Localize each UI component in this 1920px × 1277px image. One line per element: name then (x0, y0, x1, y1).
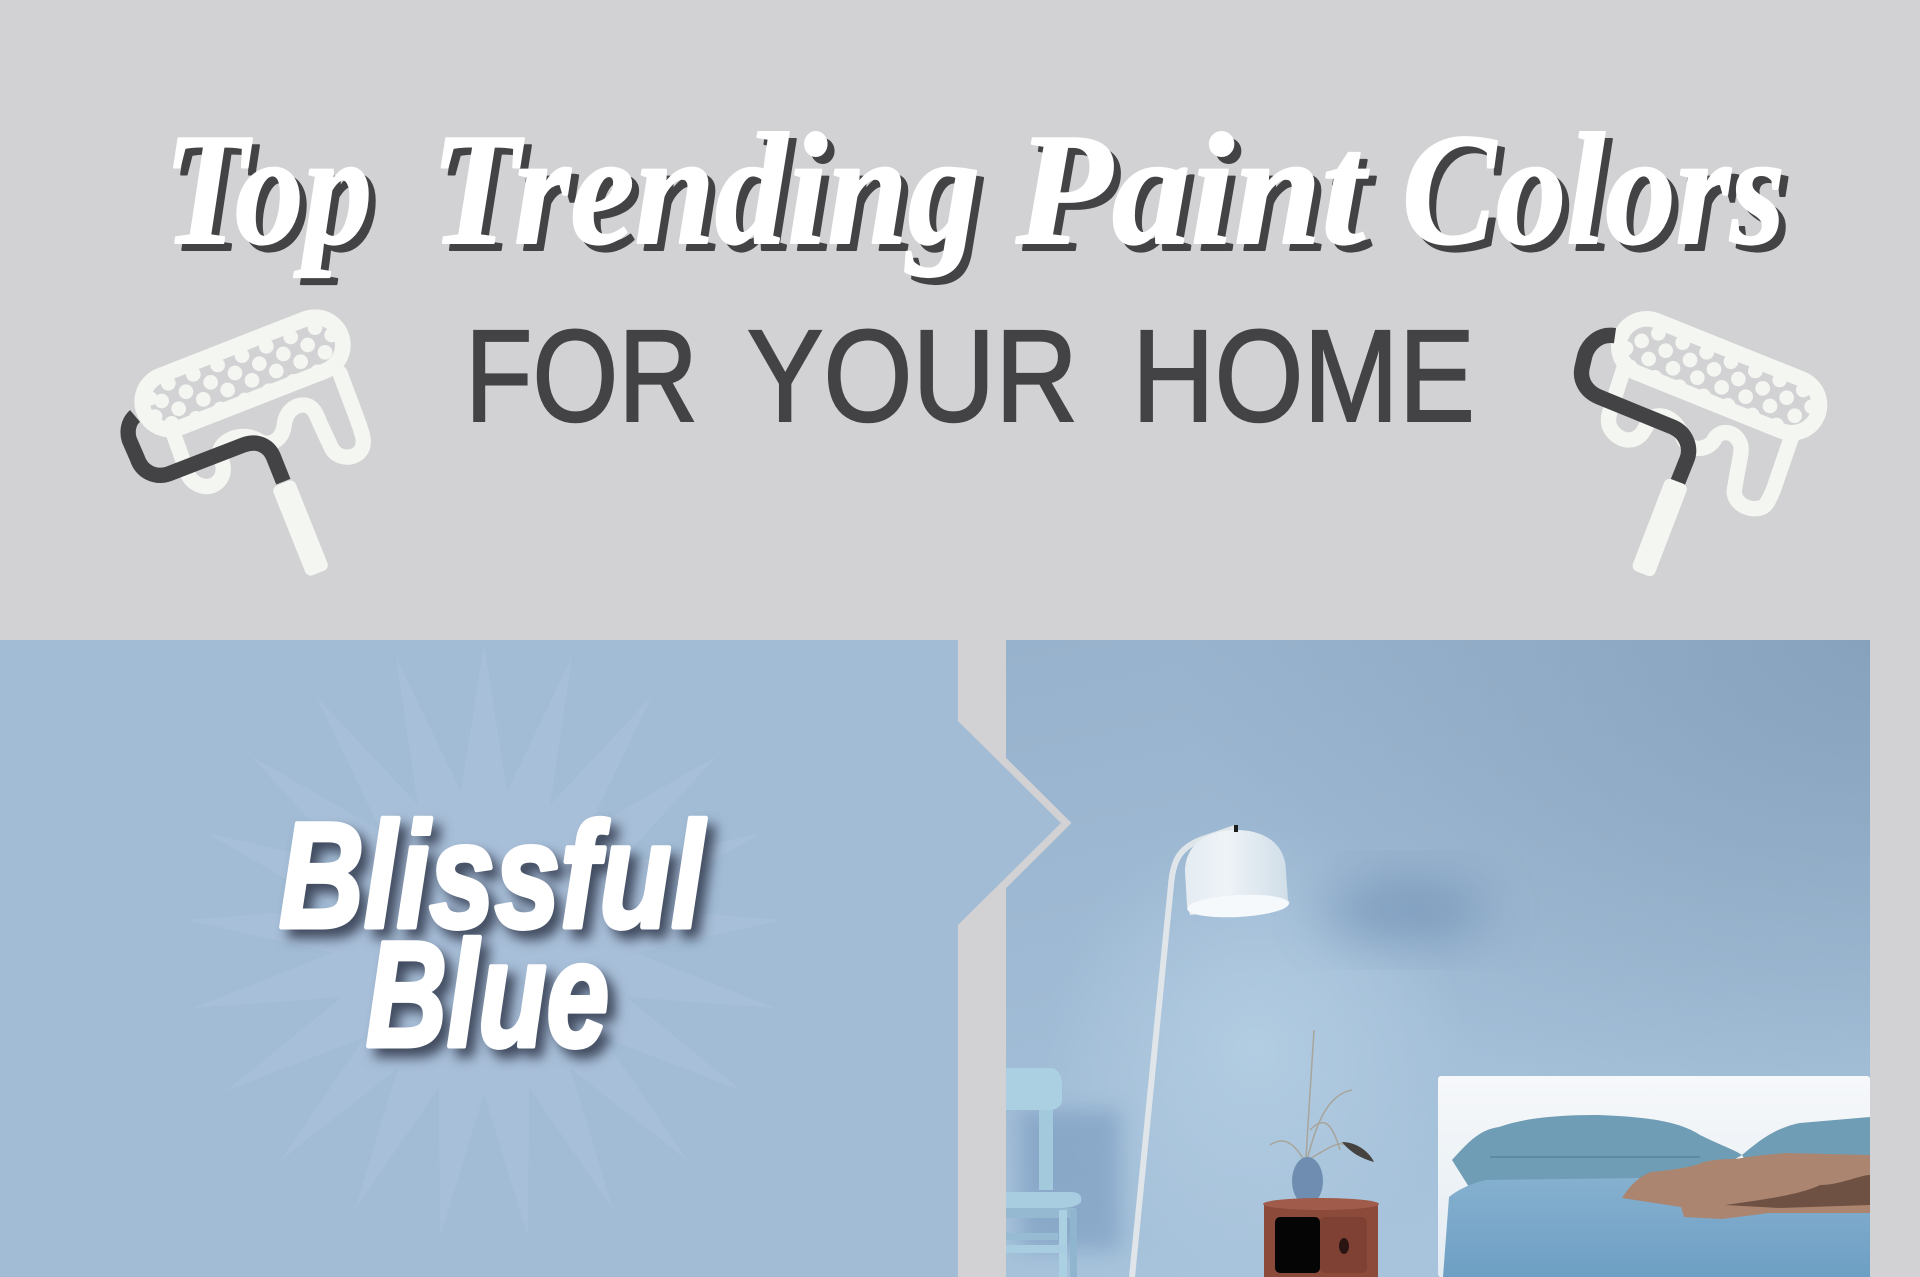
headboard (1438, 1076, 1870, 1277)
title: Top Trending Paint Colors: Trending (431, 100, 980, 278)
panel: blissful blue swatch with arrow (0, 640, 1072, 1277)
bed duvet (1443, 1178, 1870, 1277)
floor lamp (1132, 825, 1290, 1277)
title: Top Trending Paint Colors: Colors (1402, 100, 1785, 278)
subtitle: For Your Home: YOUR (747, 302, 1078, 449)
color name: Blissful Blue: Blissful (279, 791, 707, 959)
photo: blue bedroom (1006, 640, 1870, 1277)
upper right wall shade (1455, 640, 1870, 1014)
bed pillows (1452, 1115, 1870, 1187)
swatch panel (0, 640, 1061, 1277)
lamp shadow on wall (1320, 880, 1490, 940)
subtitle: For Your Home: HOME (1132, 302, 1475, 449)
wall glow (1146, 921, 1356, 1140)
knitted blanket (1622, 1153, 1870, 1219)
side table (1263, 1198, 1379, 1277)
title: Top Trending Paint Colors: Top (164, 100, 372, 278)
color name: Blissful Blue: Blue (366, 910, 609, 1078)
arrow outline (958, 710, 1072, 936)
chair shadow on wall (1020, 1110, 1120, 1250)
subtitle: For Your Home (465, 302, 1475, 449)
icon: left paint roller (128, 320, 363, 577)
chair (1006, 1068, 1081, 1277)
subtitle: For Your Home: FOR (465, 302, 698, 449)
vase with dried stems (1270, 1030, 1374, 1205)
starburst (187, 644, 781, 1237)
color name: Blissful Blue (279, 791, 707, 1078)
title: Top Trending Paint Colors (164, 100, 1785, 278)
icon: right paint roller (1582, 326, 1819, 578)
title: Top Trending Paint Colors: Paint (1015, 100, 1369, 278)
